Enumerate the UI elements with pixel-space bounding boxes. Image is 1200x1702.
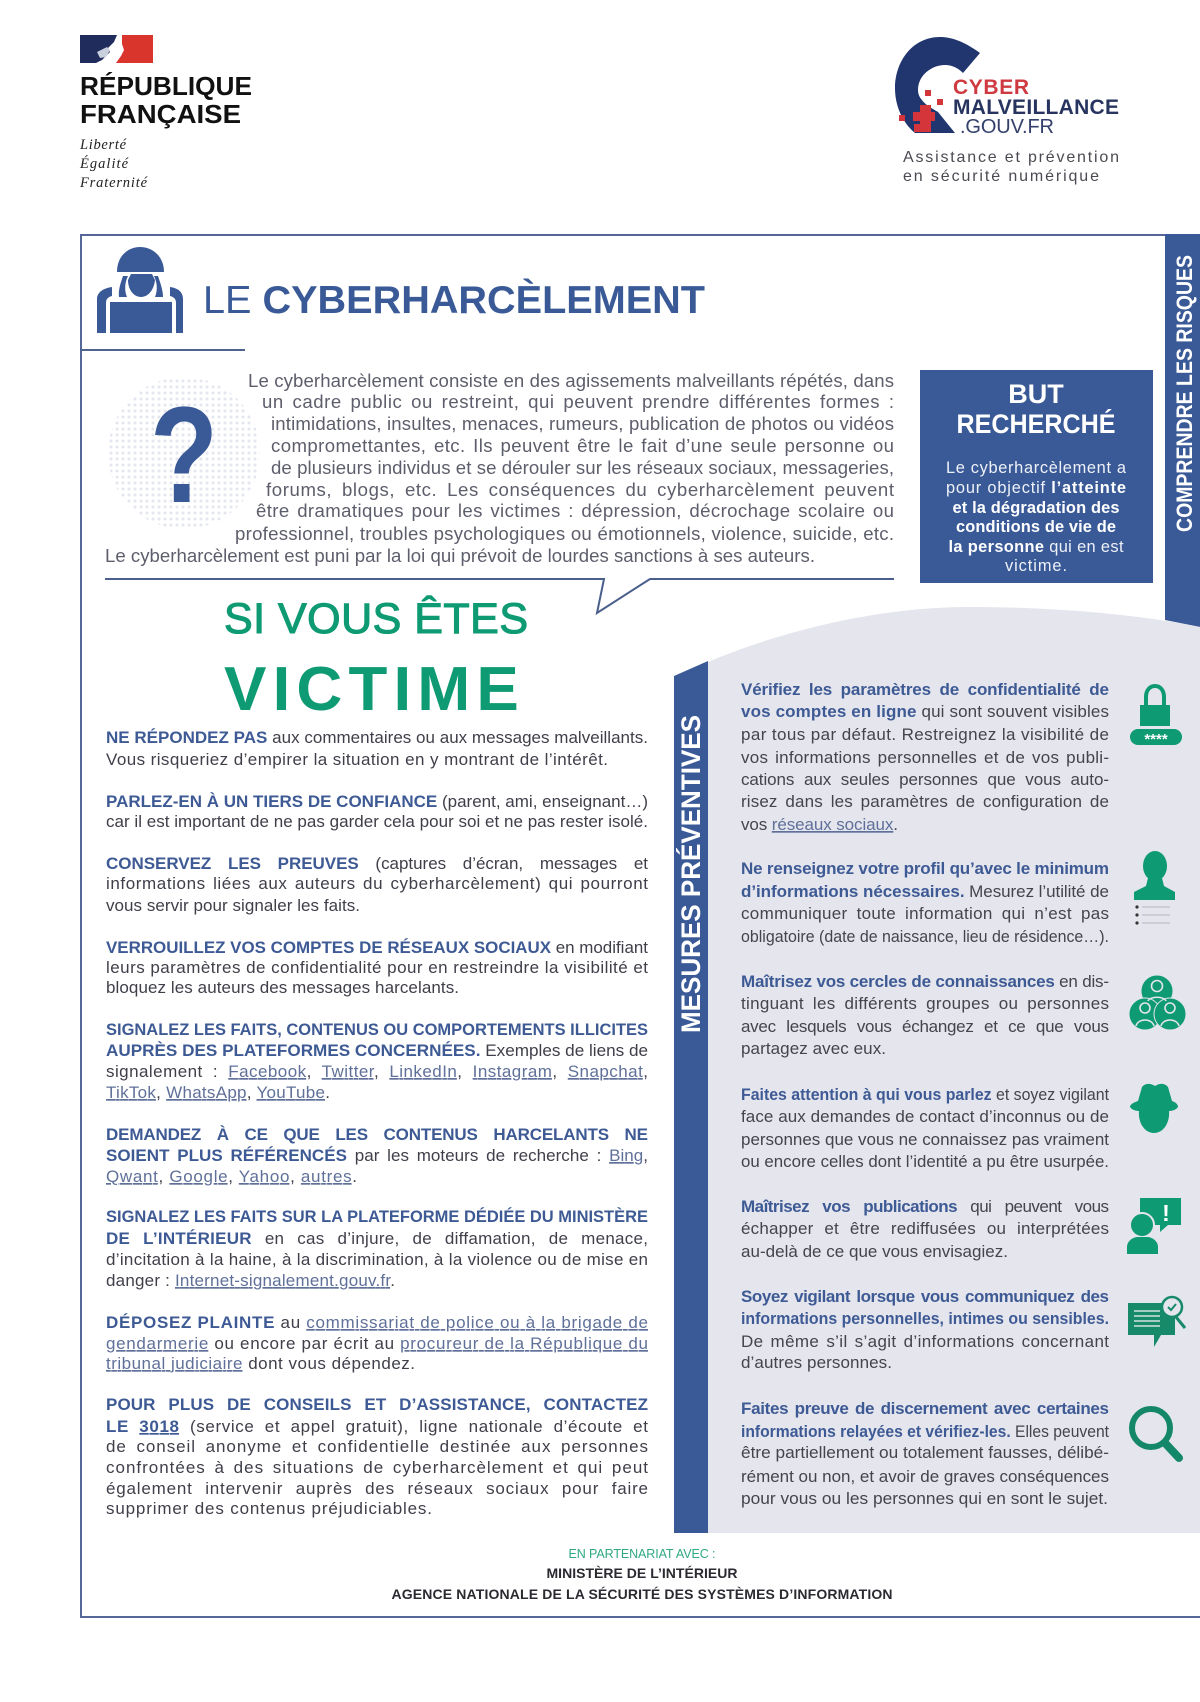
measure 3: Maîtrisez vos cercles de connaissances en dis- [741, 972, 1109, 991]
tagline: Assistance et prévention [903, 149, 1119, 166]
measure 3: avec lesquels vous échangez et ce que vous [741, 1017, 1109, 1036]
advice 5 [106, 1020, 648, 1102]
advice 8 [106, 1313, 648, 1373]
measure 4: ou encore celles dont l’identité a pu être usurpée. [741, 1152, 1109, 1171]
panel heading [956, 379, 1116, 439]
measure 5: Maîtrisez vos publications qui peuvent vous [741, 1197, 1109, 1216]
vertical heading tab [674, 661, 708, 1533]
intro text: forums, blogs, etc. Les conséquences du cyberharcèlement peuvent [266, 479, 895, 500]
icon: padlock: **** [1144, 731, 1168, 748]
speech bubble line [105, 579, 894, 613]
heading: si vous êtes victime [224, 595, 528, 724]
advice 6 [106, 1125, 648, 1186]
icon: red pixels [899, 90, 943, 132]
advice 3 [106, 854, 648, 915]
logo wordmark: FRANÇAISE [80, 99, 241, 129]
intro text: Le cyberharcèlement consiste en des agissements malveillants répétés, dans [248, 370, 894, 391]
measure 4: Faites attention à qui vous parlez et soyez vigilant [741, 1085, 1109, 1104]
icon: question mark [108, 377, 260, 532]
measure 4: personnes que vous ne connaissez pas vraiment [741, 1130, 1109, 1149]
motto: Égalité [79, 155, 129, 172]
icon: hacker [97, 247, 183, 333]
icon: padlock [1130, 686, 1182, 748]
measure 1: par tous par défaut. Restreignez la visibilité de [741, 725, 1109, 744]
icon: profile [1134, 851, 1175, 925]
advice 6: SOIENT PLUS RÉFÉRENCÉS par les moteurs de recherche : Bing, [106, 1146, 648, 1165]
advice 2: car il est important de ne pas garder cela pour soi et ne pas rester isolé. [106, 812, 648, 831]
advice 7: d’incitation à la haine, à la discrimination, à la violence ou de mise en [106, 1250, 648, 1269]
measure 5: échapper et être rediffusées ou interprétées [741, 1219, 1109, 1238]
advice 3: vous servir pour signaler les faits. [106, 896, 360, 915]
advice 4: VERROUILLEZ VOS COMPTES DE RÉSEAUX SOCIAUX en modifiant [106, 938, 648, 957]
measure 1: risez dans les paramètres de configuration de [741, 792, 1109, 811]
motto: Fraternité [79, 175, 148, 191]
intro text: être dramatiques pour les victimes : dépression, décrochage scolaire ou [256, 500, 894, 521]
advice 1 [106, 728, 648, 769]
measure 1: Vérifiez les paramètres de confidentialité de [741, 680, 1109, 699]
logo text: CYBER [953, 76, 1029, 99]
vertical heading tab: MESURES PRÉVENTIVES [675, 715, 706, 1033]
intro text: compromettantes, etc. Ils peuvent être le fait d’une seule personne ou [271, 435, 894, 456]
advice 8: gendarmerie ou encore par écrit au procureur de la République du [106, 1334, 648, 1353]
measure 1: vos comptes en ligne qui sont souvent visibles [741, 702, 1109, 721]
intro text: intimidations, insultes, menaces, rumeurs, publication de photos ou vidéos [271, 413, 894, 434]
measure 6: d’autres personnes. [741, 1353, 892, 1372]
measure 6: Soyez vigilant lorsque vous communiquez des [741, 1287, 1109, 1306]
measure 1: vos informations personnelles et de vos publi- [741, 748, 1109, 767]
measure 6: De même s’il s’agit d’informations concernant [741, 1332, 1109, 1351]
measure 1: vos réseaux sociaux. [741, 815, 898, 834]
motto: Liberté [79, 137, 127, 153]
measure 2: d’informations nécessaires. Mesurez l’utilité de [741, 882, 1109, 901]
motto [79, 137, 148, 191]
measure 1 [741, 680, 1109, 834]
advice 9: POUR PLUS DE CONSEILS ET D’ASSISTANCE, CONTACTEZ [106, 1395, 648, 1414]
victim advice column [106, 728, 648, 1518]
panel heading: RECHERCHÉ [956, 408, 1116, 439]
intro text: de plusieurs individus et se dérouler sur les réseaux sociaux, messageries, [271, 457, 894, 478]
advice 3: informations liées aux auteurs du cyberharcèlement) qui pourront [106, 874, 648, 893]
advice 5: AUPRÈS DES PLATEFORMES CONCERNÉES. Exemples de liens de [106, 1041, 648, 1060]
footer partners: MINISTÈRE DE L’INTÉRIEUR [546, 1565, 738, 1581]
title: LE CYBERHARCÈLEMENT [203, 278, 705, 322]
advice 5: SIGNALEZ LES FAITS, CONTENUS OU COMPORTEMENTS ILLICITES [106, 1020, 648, 1039]
advice 5: TikTok, WhatsApp, YouTube. [106, 1083, 330, 1102]
icon: hat figure [1130, 1084, 1178, 1133]
measure 2: Ne renseignez votre profil qu’avec le minimum [741, 859, 1109, 878]
advice 2: PARLEZ-EN À UN TIERS DE CONFIANCE (parent, ami, enseignant…) [106, 792, 648, 811]
advice 5: signalement : Facebook, Twitter, LinkedIn, Instagram, Snapchat, [106, 1062, 648, 1081]
advice 8: tribunal judiciaire dont vous dépendez. [106, 1354, 415, 1373]
measure 6 [741, 1287, 1109, 1372]
advice 6: DEMANDEZ À CE QUE LES CONTENUS HARCELANTS NE [106, 1125, 648, 1144]
measure 7: rément ou non, et avoir de graves conséquences [741, 1467, 1109, 1486]
panel body: la personne qui en est [948, 538, 1124, 556]
intro text: Le cyberharcèlement est puni par la loi qui prévoit de lourdes sanctions à ses auteurs. [105, 545, 815, 566]
tagline: en sécurité numérique [903, 168, 1099, 185]
panel body: conditions de vie de [956, 518, 1116, 536]
measure 4: face aux demandes de contact d’inconnus ou de [741, 1107, 1109, 1126]
icon: alert message: ! [1162, 1200, 1170, 1226]
advice 7: danger : Internet-signalement.gouv.fr. [106, 1271, 395, 1290]
icon: C mark [895, 37, 980, 133]
measure 2: obligatoire (date de naissance, lieu de résidence…). [741, 927, 1109, 946]
logo text: MALVEILLANCE [953, 96, 1119, 119]
footer partners: AGENCE NATIONALE DE LA SÉCURITÉ DES SYSTÈMES D’INFORMATION [392, 1586, 892, 1602]
measure 4 [741, 1085, 1109, 1171]
measure 2: communiquer toute information qui n’est pas [741, 904, 1109, 923]
measure 7: pour vous ou les personnes qui en sont le sujet. [741, 1489, 1108, 1508]
advice 4 [106, 938, 648, 997]
footer partners [392, 1547, 892, 1602]
advice 7: SIGNALEZ LES FAITS SUR LA PLATEFORME DÉDIÉE DU MINISTÈRE [106, 1207, 648, 1226]
side tab: comprendre les risques: COMPRENDRE LES RISQUES [1172, 255, 1197, 532]
measure 7: être partiellement ou totalement fausses, délibé- [741, 1443, 1109, 1462]
measure 1: cations aux seules personnes que vous auto- [741, 770, 1109, 789]
advice 9: confrontées à des situations de cyberharcèlement et qui peut [106, 1458, 648, 1477]
intro text: professionnel, troubles psychologiques ou émotionnels, violence, suicide, etc. [235, 523, 894, 544]
logo: République française [79, 35, 252, 191]
heading: si vous êtes victime: SI VOUS ÊTES [224, 595, 528, 643]
measure 3: partagez avec eux. [741, 1039, 886, 1058]
panel body: victime. [1005, 557, 1067, 575]
advice 4: bloquez les auteurs des messages harcelants. [106, 978, 459, 997]
advice 7: DE L’INTÉRIEUR en cas d’injure, de diffamation, de menace, [106, 1229, 648, 1248]
advice 8: DÉPOSEZ PLAINTE au commissariat de police ou à la brigade de [106, 1313, 648, 1332]
advice 7 [106, 1207, 648, 1290]
logo text [953, 76, 1119, 138]
footer partners: EN PARTENARIAT AVEC : [568, 1547, 716, 1561]
advice 1: Vous risqueriez d’empirer la situation en y montrant de l’intérêt. [106, 750, 608, 769]
panel body: pour objectif l’atteinte [946, 479, 1126, 497]
icon: alert message [1127, 1198, 1181, 1254]
panel: mesures préventives [674, 607, 1200, 1533]
advice 3: CONSERVEZ LES PREUVES (captures d’écran, messages et [106, 854, 648, 873]
panel body: et la dégradation des [952, 499, 1120, 517]
measure 3: tinguant les différents groupes ou personnes [741, 994, 1109, 1013]
measure 3 [741, 972, 1109, 1058]
icon: flag [80, 35, 153, 63]
advice 9: de conseil anonyme et confidentielle destinée aux personnes [106, 1437, 648, 1456]
heading rule [80, 349, 245, 351]
preventive measures text [741, 680, 1109, 1508]
advice 6: Qwant, Google, Yahoo, autres. [106, 1167, 357, 1186]
logo wordmark: RÉPUBLIQUE [80, 71, 252, 101]
icon: magnifier [1132, 1409, 1179, 1458]
logo text: .GOUV.FR [960, 116, 1054, 138]
advice 9 [106, 1395, 648, 1518]
intro text: un cadre public ou restreint, qui peuvent prendre différentes formes : [262, 391, 894, 412]
advice 2 [106, 792, 648, 831]
measure 5: au-delà de ce que vous envisagiez. [741, 1242, 1008, 1261]
measure 5 [741, 1197, 1109, 1261]
measure 7: Faites preuve de discernement avec certaines [741, 1399, 1109, 1418]
panel: but recherché [920, 370, 1153, 583]
advice 4: leurs paramètres de confidentialité pour en restreindre la visibilité et [106, 958, 648, 977]
panel body [946, 459, 1127, 575]
measure 7: informations relayées et vérifiez-les. Elles peuvent [741, 1422, 1109, 1441]
logo: cybermalveillance [895, 37, 1119, 185]
side tab: comprendre les risques [1165, 234, 1200, 627]
advice 1: NE RÉPONDEZ PAS aux commentaires ou aux messages malveillants. [106, 728, 648, 747]
measure 7 [741, 1399, 1109, 1508]
icon: circles of people [1129, 975, 1186, 1030]
panel body: Le cyberharcèlement a [946, 459, 1127, 477]
icon: question mark: ? [150, 379, 218, 532]
icon: message review [1128, 1297, 1185, 1347]
tagline [903, 149, 1119, 185]
panel background [708, 607, 1200, 1533]
measure 6: informations personnelles, intimes ou sensibles. [741, 1309, 1109, 1328]
measure 2 [741, 859, 1109, 946]
intro text [105, 370, 895, 566]
advice 9: supprimer des contenus préjudiciables. [106, 1499, 432, 1518]
advice 9: également intervenir auprès des réseaux sociaux pour faire [106, 1479, 648, 1498]
panel heading: BUT [1008, 379, 1064, 409]
advice 9: LE 3018 (service et appel gratuit), ligne nationale d’écoute et [106, 1417, 648, 1436]
logo wordmark [80, 71, 252, 129]
frame [81, 235, 1200, 1617]
heading: si vous êtes victime: VICTIME [224, 655, 525, 724]
